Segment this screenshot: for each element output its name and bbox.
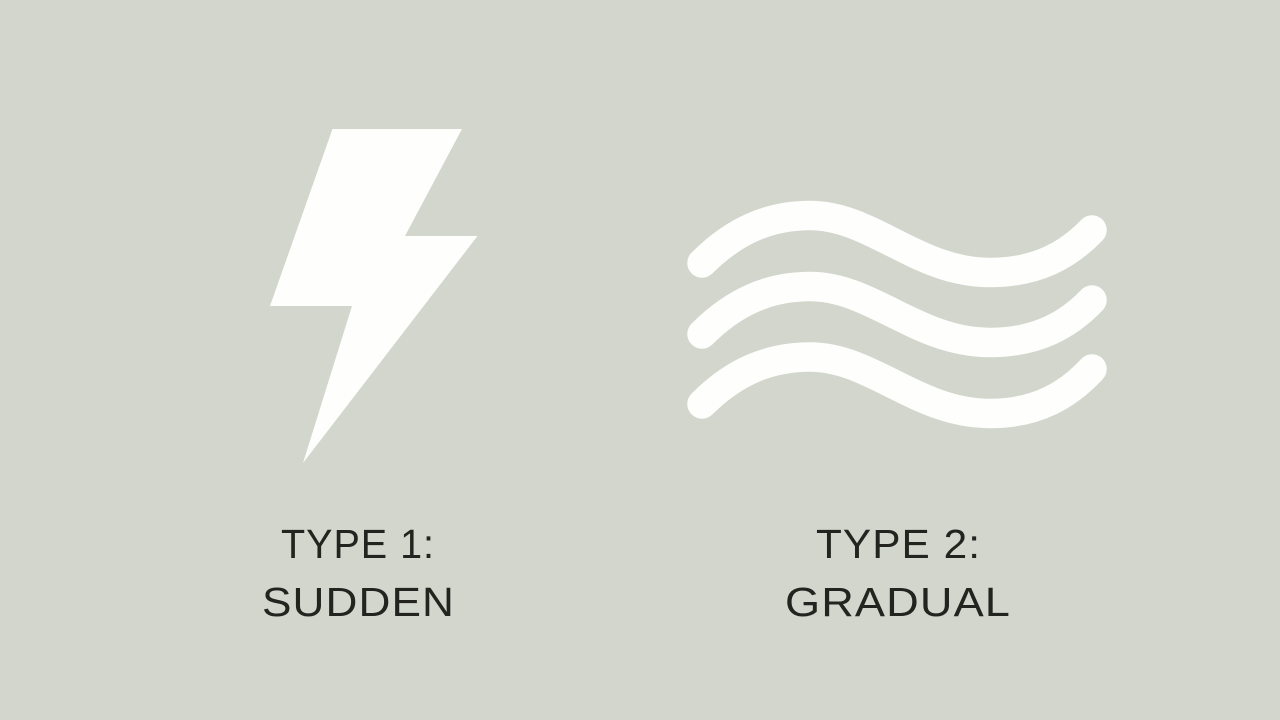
icon: three waves [702,216,1092,414]
label: type 1 sudden: TYPE 1: [281,521,435,567]
label: type 1 sudden: SUDDEN [262,579,455,625]
label: type 1 sudden [262,521,455,625]
label: type 2 gradual: GRADUAL [785,579,1011,625]
icon: lightning bolt [270,129,478,463]
label: type 2 gradual [785,521,1011,625]
label: type 2 gradual: TYPE 2: [816,521,981,567]
